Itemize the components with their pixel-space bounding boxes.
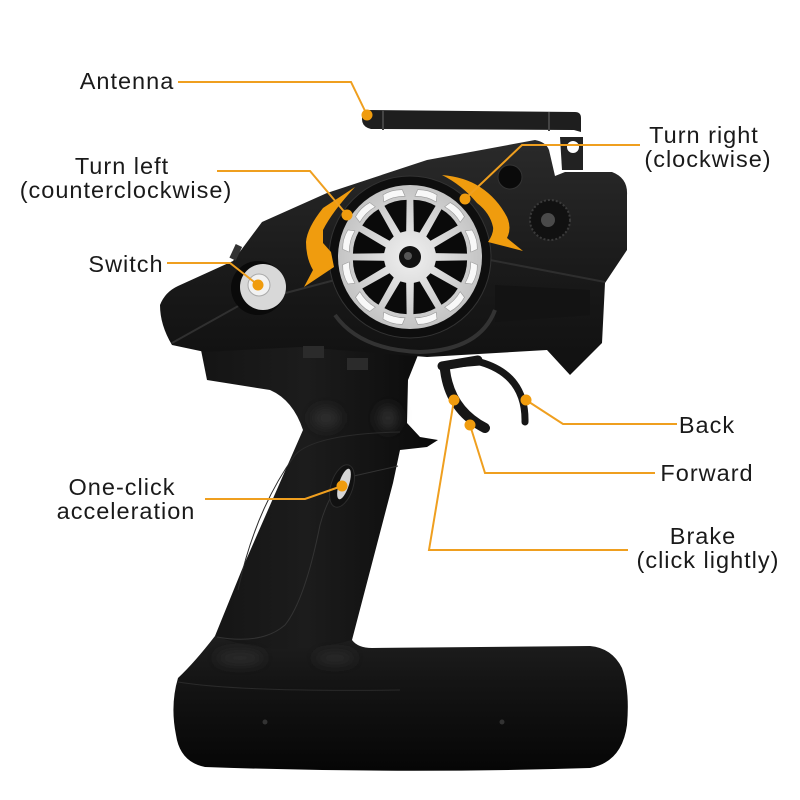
wheel surround highlight <box>335 310 495 352</box>
label: clockwise: (clockwise) <box>644 146 772 172</box>
label: switch: Switch <box>88 251 164 277</box>
shell seam <box>172 280 335 343</box>
base <box>173 636 628 771</box>
label: turn left: Turn left <box>75 153 169 179</box>
label: brake: Brake <box>670 523 736 549</box>
antenna <box>362 110 583 170</box>
icon: small port <box>498 165 522 189</box>
label: counterclockwise: (counterclockwise) <box>20 177 232 203</box>
trim knob <box>530 200 570 240</box>
label: antenna: Antenna <box>80 68 174 94</box>
grip panel seam <box>217 466 398 639</box>
texture grips <box>303 346 324 358</box>
label: click lightly: (click lightly) <box>637 547 779 573</box>
grip <box>198 335 438 649</box>
icon: base screws <box>262 720 504 724</box>
grip highlights <box>216 406 398 664</box>
trigger <box>442 360 525 428</box>
switch button <box>231 261 286 315</box>
label: one-click: One-click <box>69 474 175 500</box>
label: acceleration: acceleration <box>57 498 195 524</box>
marker dots <box>252 110 532 492</box>
label: back: Back <box>679 412 735 438</box>
arrow: turn left <box>304 187 355 287</box>
leader lines <box>167 82 677 550</box>
base seam <box>178 682 400 690</box>
label: turn right: Turn right <box>649 122 759 148</box>
label: forward: Forward <box>660 460 754 486</box>
arrow: turn right <box>442 175 523 251</box>
upper shell <box>160 140 627 375</box>
controller body <box>160 140 628 771</box>
one-click acceleration button <box>325 462 359 510</box>
steering wheel <box>329 176 491 338</box>
